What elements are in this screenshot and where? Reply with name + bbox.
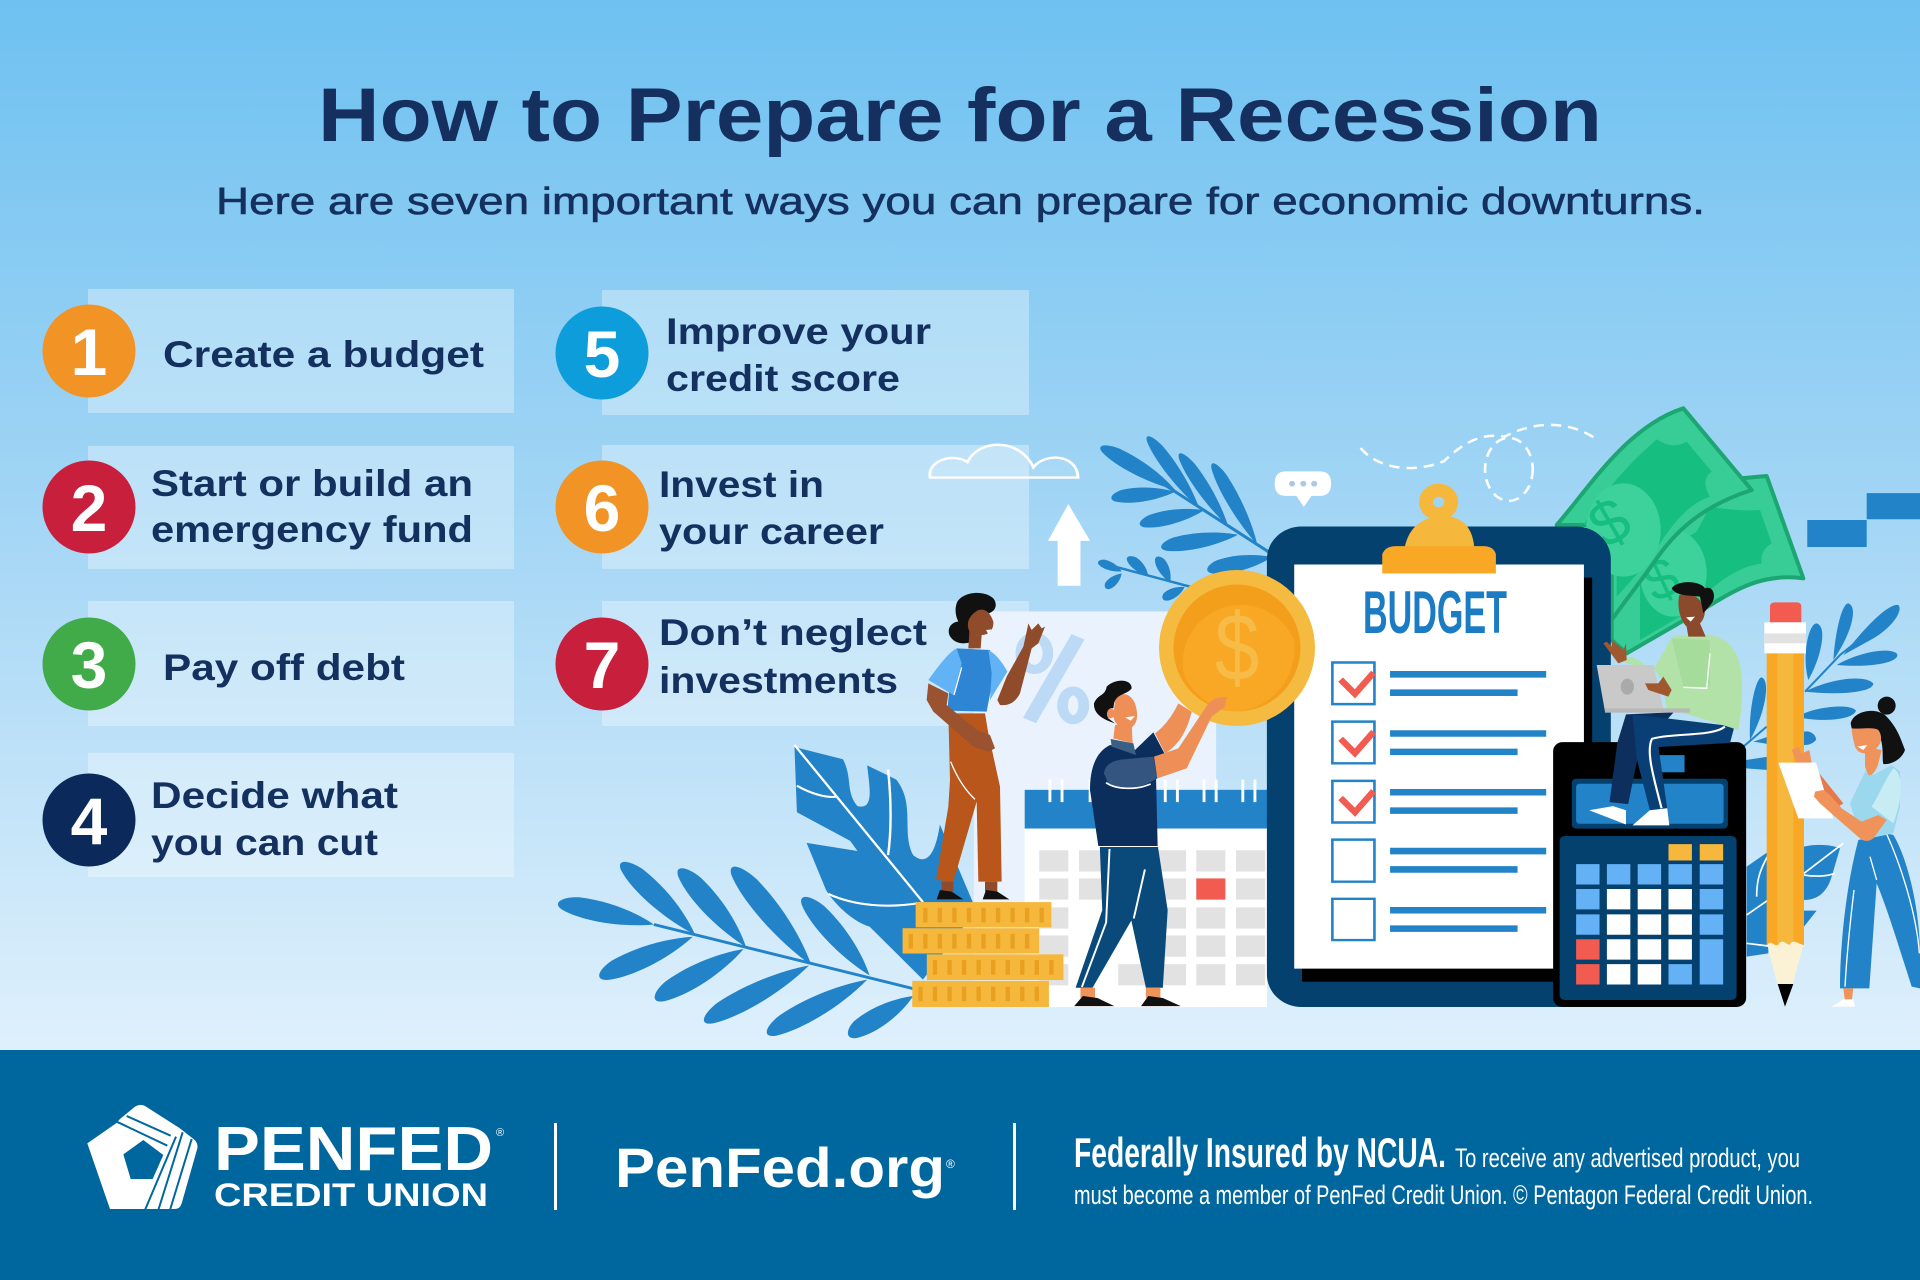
calculator xyxy=(1553,742,1746,1007)
man's raised back arm xyxy=(1155,703,1192,753)
up arrow xyxy=(1048,504,1090,586)
percent panel xyxy=(974,611,1216,1007)
item 1: create a budget xyxy=(42,289,514,413)
pencil xyxy=(1764,602,1806,1007)
website: PenFed.org xyxy=(615,1136,945,1199)
seated man upper body with laptop xyxy=(1597,582,1742,730)
divider xyxy=(1013,1123,1016,1210)
woman with note xyxy=(1778,697,1920,1007)
cloud xyxy=(930,445,1078,478)
PenFed logo xyxy=(87,1105,504,1213)
title: How to Prepare for a Recession xyxy=(318,73,1602,158)
item 3: pay off debt xyxy=(42,601,514,726)
item 7: don't neglect investments xyxy=(556,601,1029,726)
bottom fern xyxy=(555,855,920,1043)
monstera leaf xyxy=(794,745,976,980)
gold coin xyxy=(1159,570,1315,726)
woman on coins xyxy=(927,593,1045,899)
item 6: invest in your career: 6 xyxy=(584,471,620,545)
top fern xyxy=(1097,433,1277,576)
legal text: Federally Insured by NCUA. xyxy=(1074,1129,1446,1176)
item 7: don't neglect investments: investments xyxy=(659,660,898,701)
logo wordmark: PENFED xyxy=(214,1115,493,1184)
item 5: improve credit score: Improve your xyxy=(666,311,931,352)
BUDGET heading: BUDGET xyxy=(1363,579,1507,646)
legal text: To receive any advertised product, you xyxy=(1455,1143,1800,1173)
calculator and seated man's legs xyxy=(1553,712,1746,1007)
item 4: decide what you can cut: 4 xyxy=(71,784,108,858)
checklist xyxy=(1332,662,1546,940)
item 5: improve credit score xyxy=(556,290,1029,415)
item 2: emergency fund xyxy=(42,446,514,569)
item 2: emergency fund: emergency fund xyxy=(151,509,473,550)
calendar xyxy=(1025,780,1267,1007)
clipboard and decorations xyxy=(1267,425,1920,1007)
seated man's legs xyxy=(1589,712,1734,825)
item 4: decide what you can cut: Decide what xyxy=(151,775,398,816)
item 7: don't neglect investments: 7 xyxy=(584,628,620,702)
item 2: emergency fund: 2 xyxy=(71,471,107,545)
blue blocks xyxy=(1807,493,1920,547)
subtitle: Here are seven important ways you can prepare for economic downturns. xyxy=(216,181,1705,223)
man holding coin xyxy=(1090,681,1227,846)
coin stack xyxy=(903,902,1063,1007)
item 3: pay off debt: 3 xyxy=(71,628,107,702)
money bills: $ xyxy=(1577,484,1643,562)
item 7: don't neglect investments: Don’t neglect xyxy=(659,612,927,653)
foliage behind pencil xyxy=(1743,603,1900,957)
dashed flight path xyxy=(1361,425,1598,501)
item 4: decide what you can cut xyxy=(42,753,514,877)
website: ® xyxy=(946,1157,955,1171)
item 1: create a budget: Create a budget xyxy=(163,334,484,375)
legal text xyxy=(1074,1129,1813,1210)
money bills xyxy=(1557,408,1803,653)
item 3: pay off debt: Pay off debt xyxy=(163,647,405,688)
money bills: $ xyxy=(1634,545,1689,615)
illustration backdrop: cloud, arrow, ferns, percent panel, calendar xyxy=(555,433,1277,1043)
clipboard xyxy=(1267,484,1611,1007)
item 1: create a budget: 1 xyxy=(71,315,107,389)
small fern xyxy=(1096,553,1194,603)
item 2: emergency fund: Start or build an xyxy=(151,463,473,504)
PenFed logo: ® xyxy=(496,1127,504,1139)
item 6: invest in your career: your career xyxy=(659,511,884,552)
man's trousers and shoes xyxy=(1074,847,1181,1006)
divider xyxy=(554,1123,557,1210)
item 6: invest in your career xyxy=(556,445,1029,569)
item 5: improve credit score: credit score xyxy=(666,358,900,399)
speech bubble xyxy=(1275,471,1331,507)
coin stack and man's legs xyxy=(903,847,1181,1007)
gold coin: $ xyxy=(1215,593,1259,701)
item 4: decide what you can cut: you can cut xyxy=(151,822,378,863)
item 6: invest in your career: Invest in xyxy=(659,464,824,505)
logo mark xyxy=(87,1105,197,1210)
footer band xyxy=(0,1050,1920,1280)
item 5: improve credit score: 5 xyxy=(584,317,620,391)
pencil and woman with note xyxy=(1764,602,1920,1007)
PenFed logo: CREDIT UNION xyxy=(214,1177,488,1213)
